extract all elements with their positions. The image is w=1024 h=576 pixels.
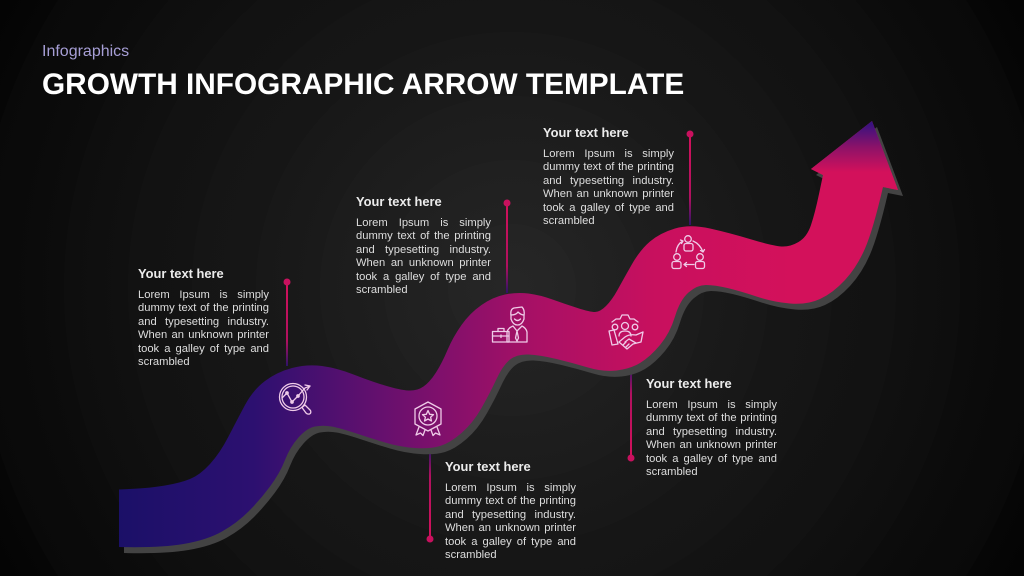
growth arrow ribbon [119,121,898,547]
text block 4: When an unknown printer [445,522,576,534]
text block 5: When an unknown printer [646,439,777,451]
text block 1: and typesetting industry. [138,316,269,328]
text block 2: scrambled [356,284,408,296]
text block 4: Lorem Ipsum is simply [445,482,576,494]
text block 1: scrambled [138,356,190,368]
text block 4: dummy text of the printing [445,495,576,507]
arrow head [811,121,898,190]
growth arrow shadow [124,127,903,553]
text block 4: Your text here [445,459,531,474]
text block 5: scrambled [646,466,698,478]
text block 5: and typesetting industry. [646,426,777,438]
heading: title: GROWTH INFOGRAPHIC ARROW TEMPLATE [42,68,684,101]
icon: businessman with briefcase [492,307,527,342]
text block 1: Lorem Ipsum is simply [138,289,269,301]
icon: team gear and handshake [609,315,643,349]
text block 3: Your text here [543,125,629,140]
heading: subtitle: Infographics [42,43,129,60]
icon: award badge [415,402,441,436]
text block 5: took a galley of type and [646,453,777,465]
text block 4 [445,459,576,561]
text block 3: and typesetting industry. [543,175,674,187]
text block 3: took a galley of type and [543,202,674,214]
text block 2: Your text here [356,194,442,209]
text block 3: scrambled [543,215,595,227]
text block 2: and typesetting industry. [356,244,491,256]
text block 5: Lorem Ipsum is simply [646,399,777,411]
text block 1: took a galley of type and [138,343,269,355]
text block 2 [356,194,491,296]
text block 2: When an unknown printer [356,257,491,269]
icon: magnifier with chart [280,384,311,414]
text block 4: and typesetting industry. [445,509,576,521]
text block 5 [646,376,777,478]
text block 2: took a galley of type and [356,271,491,283]
text block 2: dummy text of the printing [356,230,491,242]
connector lines [284,130,694,542]
text block 4: took a galley of type and [445,536,576,548]
icon: team cycle [672,236,704,268]
text block 3: dummy text of the printing [543,161,674,173]
text block 3: Lorem Ipsum is simply [543,148,674,160]
text block 5: Your text here [646,376,732,391]
text block 4: scrambled [445,549,497,561]
text block 1 [138,266,269,368]
text block 1: Your text here [138,266,224,281]
text block 1: When an unknown printer [138,329,269,341]
text block 2: Lorem Ipsum is simply [356,217,491,229]
text block 3 [543,125,674,227]
text block 5: dummy text of the printing [646,412,777,424]
text block 1: dummy text of the printing [138,302,269,314]
text block 3: When an unknown printer [543,188,674,200]
